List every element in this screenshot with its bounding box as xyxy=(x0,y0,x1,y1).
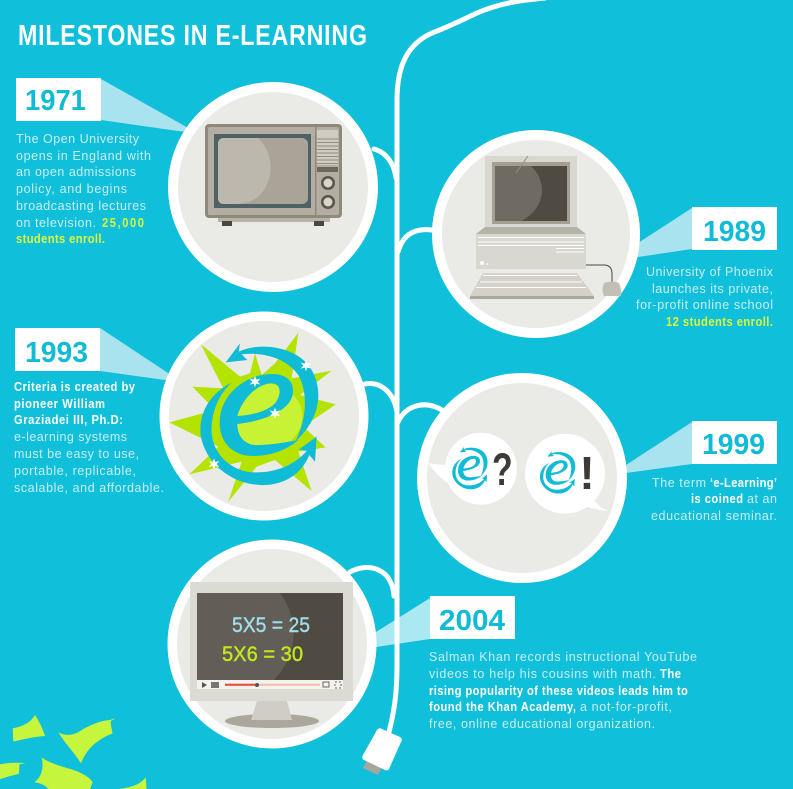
icon: desktop computer xyxy=(470,156,621,299)
circle 1993 xyxy=(160,312,368,520)
circle 2004 xyxy=(168,540,376,748)
text 1999: educational seminar. xyxy=(651,509,777,523)
text 2004: rising popularity of these videos leads him to xyxy=(429,683,688,698)
milestone 1989 xyxy=(432,130,777,338)
text 1993: must be easy to use, xyxy=(14,447,139,461)
callout beam 1999 xyxy=(610,422,692,477)
year label 1989 xyxy=(692,207,777,250)
text 1993: pioneer William xyxy=(14,396,105,411)
icon: small e logo left xyxy=(452,447,488,489)
text 2004: free, online educational organization. xyxy=(429,717,655,731)
milestone 1993 xyxy=(14,312,368,520)
text 1971: students enroll. xyxy=(16,231,105,246)
cable timeline xyxy=(350,0,545,732)
speech bubble with exclamation xyxy=(525,434,608,514)
year label 1989: 1989 xyxy=(703,216,766,248)
year label 1993 xyxy=(15,328,100,371)
text 1989: for-profit online school xyxy=(636,298,773,312)
text 1971: The Open University xyxy=(16,132,140,146)
year label 1971 xyxy=(16,78,101,121)
year label 1971: 1971 xyxy=(25,85,86,117)
text 1993: Graziadei III, Ph.D: xyxy=(14,412,123,427)
text 1971: an open admissions xyxy=(16,165,136,179)
text 1989: 12 students enroll. xyxy=(666,314,773,329)
cable plug xyxy=(362,728,402,775)
circle 1999 xyxy=(417,373,627,583)
icon: video monitor xyxy=(190,582,353,728)
milestone 1971 xyxy=(16,78,378,292)
text 1989: University of Phoenix xyxy=(646,265,774,279)
milestone 1999 xyxy=(417,373,777,583)
text 1989 xyxy=(636,265,774,329)
text 1999: at an xyxy=(747,492,777,506)
text 1993: portable, replicable, xyxy=(14,464,136,478)
text 1971: broadcasting lectures xyxy=(16,199,146,213)
year label 1993: 1993 xyxy=(25,337,88,369)
year label 1999 xyxy=(692,421,777,464)
math equation two: 5X6 = 30 xyxy=(222,643,303,666)
math equation one: 5X5 = 25 xyxy=(232,614,310,637)
text 1971: policy, and begins xyxy=(16,182,127,196)
speech bubble with question xyxy=(428,433,517,505)
text 2004 xyxy=(429,650,697,731)
icon: e-learning swirl with starburst xyxy=(169,333,336,502)
text 2004: The xyxy=(660,666,681,681)
text 1993: e-learning systems xyxy=(14,430,127,444)
text 1989: launches its private, xyxy=(652,282,773,296)
text 1999 xyxy=(651,475,777,523)
text 1999: is coined xyxy=(691,491,743,506)
callout beam 1993 xyxy=(100,328,182,382)
circle 1971 xyxy=(168,82,378,292)
text 1993: Criteria is created by xyxy=(14,379,135,394)
text 1993 xyxy=(14,379,164,495)
callout beam 1989 xyxy=(625,208,692,262)
speech bubble with exclamation: ! xyxy=(579,447,595,499)
icon: small e logo right xyxy=(540,451,575,494)
year label 2004 xyxy=(430,596,515,639)
confetti xyxy=(0,715,147,789)
text 2004: Salman Khan records instructional YouTube xyxy=(429,650,697,664)
text 2004: videos to help his cousins with math. xyxy=(429,667,656,681)
text 1999: The term xyxy=(652,476,706,490)
milestone 2004 xyxy=(168,540,697,748)
title: MILESTONES IN E-LEARNING xyxy=(18,18,367,52)
year label 1999: 1999 xyxy=(702,429,765,461)
callout beam 1971 xyxy=(101,79,196,133)
icon: television xyxy=(205,124,342,226)
text 1971: on television. xyxy=(16,216,96,230)
text 1999: ‘e-Learning’ xyxy=(710,475,777,490)
text 1971: opens in England with xyxy=(16,149,151,163)
circle 1989 xyxy=(432,130,640,338)
speech bubble with question: ? xyxy=(492,445,513,495)
text 1971: 25,000 xyxy=(102,215,144,230)
year label 2004: 2004 xyxy=(439,605,505,637)
text 1971 xyxy=(16,132,151,246)
callout beam 2004 xyxy=(350,598,430,648)
text 1993: scalable, and affordable. xyxy=(14,481,164,495)
text 2004: found the Khan Academy, xyxy=(429,699,576,714)
text 2004: a not-for-profit, xyxy=(580,700,672,714)
